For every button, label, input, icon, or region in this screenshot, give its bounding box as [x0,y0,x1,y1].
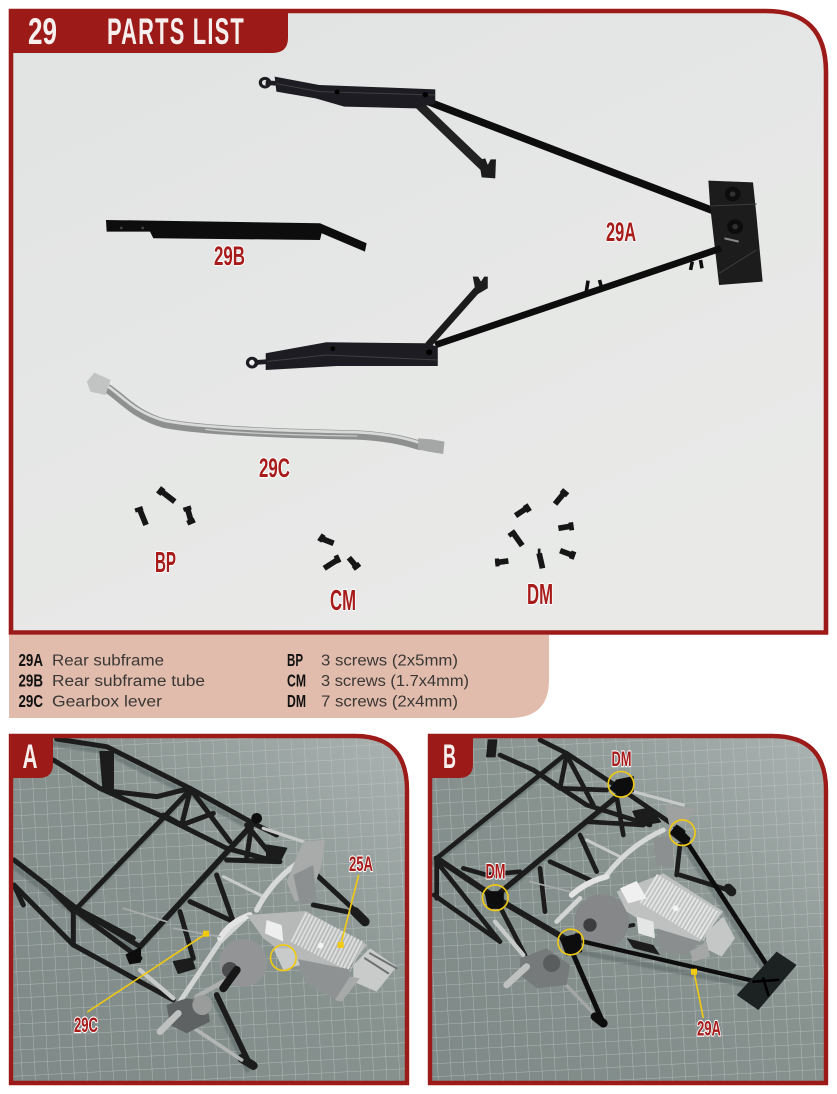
highlight circle right [670,820,695,846]
panel B border [430,736,826,1083]
callout 29C [74,931,209,1037]
legend DM: DM [287,691,306,711]
bell housing [219,939,267,987]
part BP, CM, DM: screws [138,489,575,568]
legend 29C: 29C [18,691,43,711]
legend 29A [18,650,164,670]
callout 29A: 29A [697,1018,721,1040]
label DM: DM [527,579,553,611]
legend 29B: 29B [18,670,43,690]
highlight circle [270,945,296,970]
part 29B: rear subframe tube [106,220,367,252]
highlight circle with label DM left: DM [486,860,506,884]
highlight circle with label DM left [482,860,508,910]
legend 29C [18,691,162,711]
chassis frame B [434,740,797,1023]
subframe 29A in place [485,777,773,1023]
tab: step A [9,734,53,778]
label 29C: 29C [259,453,290,483]
panel border: parts list [11,11,826,632]
panel A: gearbox lever step [9,734,409,1085]
legend BP: 3 screws (2x5mm) [321,652,458,670]
panel B: rear subframe step [428,734,828,1085]
heading: 29 parts list tab [9,9,288,53]
tab: step B [428,734,473,778]
label CM: CM [330,585,356,617]
legend 29B [18,670,205,690]
label 29B: 29B [214,241,245,271]
label BP: BP [155,547,176,579]
bell housing [574,894,629,949]
step number: 29 [28,11,57,52]
gearbox [617,873,723,942]
silver rods [123,828,317,1060]
highlight circle with label DM top: DM [612,748,632,771]
legend DM: 7 screws (2x4mm) [321,694,458,710]
legend DM [287,691,458,711]
panel A border [11,736,407,1083]
highlight circle with label DM top [608,748,634,797]
legend CM: 3 screws (1.7x4mm) [321,673,469,690]
callout 29C: 29C [74,1014,98,1037]
part 29A: rear subframe [247,77,763,370]
title: PARTS LIST [107,11,245,52]
tab: step B: B [443,738,456,776]
legend 29A: 29A [18,650,43,670]
highlight circle lower [558,929,584,955]
chassis frame A [11,739,397,1070]
callout 25A: 25A [349,853,373,876]
legend BP: BP [287,650,303,670]
legend 29A: Rear subframe [52,652,164,670]
legend 29C: Gearbox lever [52,694,162,710]
callout 29A [691,969,721,1040]
callout 25A [338,853,373,948]
panel: parts list photo [11,11,826,632]
gearbox [247,911,367,969]
legend CM: CM [287,670,306,690]
legend CM [287,670,469,690]
panel: parts legend [9,635,549,718]
legend 29B: Rear subframe tube [52,673,205,690]
silver rods [495,792,683,1020]
label 29A: 29A [606,217,636,247]
part 29C: gearbox lever [87,373,445,454]
tab: step A: A [22,738,38,776]
legend BP [287,650,458,670]
